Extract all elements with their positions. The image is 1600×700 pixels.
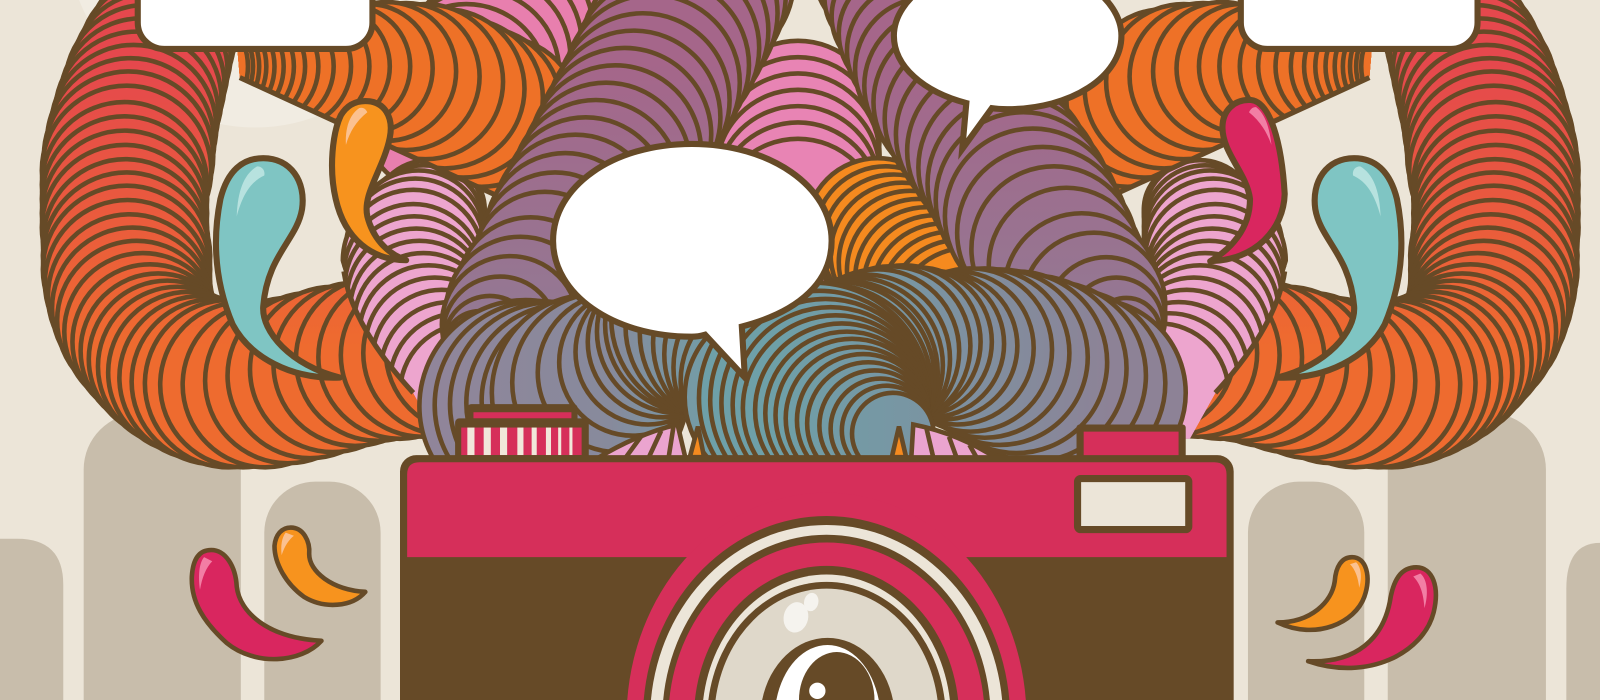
- tube: left red-orange: [42, 0, 549, 467]
- tube: top pink: [362, 0, 638, 196]
- drop: left orange: [332, 101, 406, 260]
- camera top band: [407, 462, 1227, 557]
- drop: bottom left orange: [274, 528, 365, 605]
- camera: [400, 404, 1234, 700]
- tube: left top orange: [126, 2, 580, 204]
- drop: bottom left crimson: [192, 550, 321, 659]
- speech bubble: top right: [1241, 0, 1478, 49]
- lens highlights: [781, 592, 820, 635]
- tube: central gray-teal: [699, 265, 1186, 513]
- tube: left pink spiral: [343, 160, 539, 462]
- camera lens: [627, 493, 1026, 700]
- lens pupil: [762, 638, 893, 700]
- tube: center orange: [806, 158, 1039, 391]
- camera shutter button: [1077, 424, 1186, 459]
- tube: right red-orange: [1071, 0, 1579, 467]
- camera viewfinder: [1078, 479, 1189, 530]
- camera body: [400, 455, 1234, 700]
- speech bubble: top center: [894, 0, 1121, 149]
- light circle top left: [61, 0, 449, 128]
- pink wedge left of center: [596, 424, 704, 459]
- tube: left gray-teal: [419, 220, 868, 512]
- drop: bottom right crimson: [1308, 567, 1436, 668]
- drop: bottom right orange: [1278, 557, 1367, 630]
- drop: left teal: [216, 158, 340, 378]
- tube: right purple: [816, 0, 1165, 376]
- background pillars: [0, 413, 1600, 700]
- speech bubble: top left: [138, 0, 372, 49]
- drop: right crimson: [1210, 100, 1285, 261]
- tube: right top orange: [1030, 2, 1484, 204]
- tube: left purple: [442, 0, 794, 393]
- pink wedge right of center: [892, 424, 998, 459]
- tube: right pink spiral: [1090, 160, 1286, 462]
- tube: center pink: [716, 41, 880, 302]
- speech bubble: center: [553, 144, 832, 378]
- camera dial: [455, 404, 589, 459]
- drop: right teal: [1278, 158, 1401, 378]
